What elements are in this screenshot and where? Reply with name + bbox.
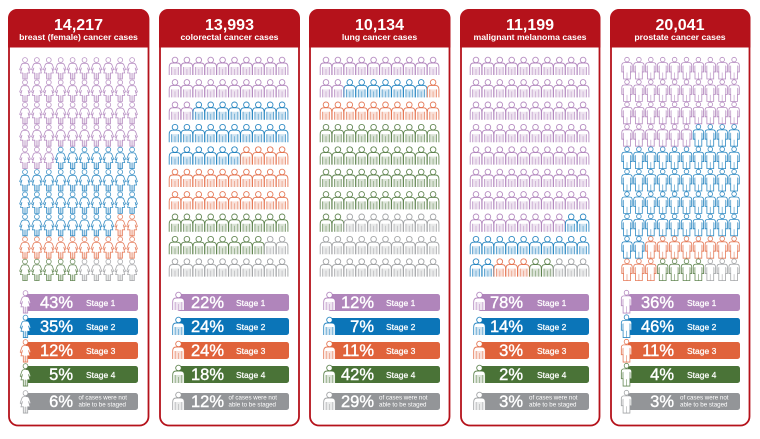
header: colorectal cancer bbox=[159, 9, 300, 48]
legend row: not staged bbox=[621, 390, 740, 413]
figures: stage 1 bbox=[320, 57, 439, 97]
legend row: stage 4: Stage 4 bbox=[236, 370, 266, 380]
figures: stage 1 bbox=[622, 57, 739, 146]
legend row: stage 2 bbox=[474, 317, 589, 336]
legend row: stage 3: Stage 3 bbox=[236, 346, 266, 356]
legend row: stage 2: 7% bbox=[350, 318, 374, 336]
figures: stage 2 bbox=[470, 214, 589, 277]
figures: stage 4 bbox=[320, 124, 439, 232]
legend row: stage 1: 12% bbox=[341, 294, 374, 312]
legend row: stage 4 bbox=[173, 365, 289, 384]
legend row: stage 3 bbox=[324, 341, 440, 360]
legend row: not staged bbox=[20, 391, 138, 413]
legend row: stage 2: Stage 2 bbox=[386, 322, 416, 332]
legend: malignant melanoma bbox=[474, 292, 589, 411]
legend row: not staged: of cases were not bbox=[228, 394, 277, 402]
legend row: stage 3 bbox=[20, 340, 138, 362]
legend row: not staged: able to be staged bbox=[78, 402, 127, 408]
figures: stage 4 bbox=[530, 259, 553, 277]
header: lung cancer: lung cancer cases bbox=[342, 32, 417, 42]
legend row: not staged: able to be staged bbox=[379, 402, 427, 408]
legend row: not staged bbox=[173, 392, 289, 411]
figures: stage 2 bbox=[20, 147, 137, 236]
legend row: stage 3 bbox=[173, 341, 289, 360]
legend: prostate cancer bbox=[621, 290, 740, 413]
legend row: stage 4 bbox=[474, 365, 589, 384]
legend row: not staged: able to be staged bbox=[680, 402, 728, 408]
legend row: stage 4: Stage 4 bbox=[687, 370, 717, 380]
header: malignant melanoma bbox=[460, 9, 600, 48]
figures: stage 1 bbox=[20, 58, 137, 169]
legend row: stage 3: 11% bbox=[642, 342, 674, 360]
header: breast cancer bbox=[8, 9, 149, 48]
header: lung cancer: 10,134 bbox=[355, 17, 404, 34]
panel: malignant melanoma bbox=[460, 9, 600, 426]
legend row: stage 4: Stage 4 bbox=[86, 370, 116, 380]
figures: stage 1 bbox=[169, 57, 288, 120]
legend row: stage 1: Stage 1 bbox=[236, 298, 266, 308]
header: lung cancer bbox=[309, 9, 450, 48]
header: colorectal cancer: 13,993 bbox=[205, 17, 254, 34]
legend row: stage 1: 78% bbox=[490, 294, 523, 312]
figures: stage 1 bbox=[470, 57, 589, 232]
header: prostate cancer bbox=[610, 9, 750, 48]
legend row: stage 2: Stage 2 bbox=[236, 322, 266, 332]
legend row: not staged: able to be staged bbox=[529, 402, 577, 408]
legend row: stage 4: 2% bbox=[499, 366, 523, 384]
legend row: stage 1: Stage 1 bbox=[537, 298, 567, 308]
legend row: stage 1: Stage 1 bbox=[86, 298, 116, 308]
legend: colorectal cancer bbox=[173, 292, 289, 411]
header: malignant melanoma: 11,199 bbox=[506, 17, 554, 34]
legend row: stage 3 bbox=[474, 341, 589, 360]
header: malignant melanoma: malignant melanoma cases bbox=[474, 32, 587, 42]
legend row: stage 1 bbox=[474, 292, 589, 312]
legend row: not staged: 12% bbox=[191, 393, 224, 411]
figures: not staged bbox=[169, 236, 288, 277]
figures: not staged bbox=[705, 259, 739, 281]
figures: stage 2 bbox=[169, 102, 288, 165]
legend row: stage 1: 43% bbox=[40, 294, 73, 312]
legend row: not staged: 6% bbox=[49, 393, 73, 411]
figure grid: colorectal cancer bbox=[169, 57, 288, 277]
figures: stage 4 bbox=[658, 259, 704, 281]
legend row: stage 1: Stage 1 bbox=[386, 298, 416, 308]
figures: stage 3 bbox=[169, 147, 288, 209]
figures: not staged bbox=[320, 214, 439, 277]
legend row: stage 2: Stage 2 bbox=[537, 322, 567, 332]
legend row: not staged: 3% bbox=[650, 393, 674, 411]
figures: stage 4 bbox=[169, 214, 288, 254]
figures: stage 3 bbox=[20, 214, 137, 258]
panel: colorectal cancer bbox=[159, 9, 300, 426]
legend row: stage 3: 3% bbox=[499, 342, 523, 360]
legend row: not staged bbox=[324, 392, 440, 411]
legend row: stage 3: Stage 3 bbox=[86, 346, 116, 356]
figure grid: breast cancer bbox=[20, 58, 137, 281]
figure grid: malignant melanoma bbox=[470, 57, 589, 277]
legend row: stage 3 bbox=[621, 339, 740, 362]
legend row: stage 4: 5% bbox=[49, 366, 73, 384]
legend row: stage 4: Stage 4 bbox=[386, 370, 416, 380]
legend row: not staged: of cases were not bbox=[680, 394, 729, 402]
legend row: stage 3: Stage 3 bbox=[386, 346, 416, 356]
figures: not staged bbox=[79, 259, 137, 281]
panel: prostate cancer bbox=[610, 9, 750, 426]
legend row: stage 4: 42% bbox=[341, 366, 374, 384]
figures: stage 3 bbox=[320, 80, 439, 120]
legend row: stage 2: Stage 2 bbox=[687, 322, 717, 332]
legend row: stage 1 bbox=[621, 290, 740, 313]
legend row: not staged: 3% bbox=[499, 393, 523, 411]
legend: lung cancer bbox=[324, 292, 440, 411]
legend row: stage 4 bbox=[20, 364, 138, 386]
legend row: stage 1 bbox=[20, 291, 138, 313]
header: prostate cancer: 20,041 bbox=[656, 17, 705, 34]
header: breast cancer: 14,217 bbox=[54, 17, 103, 34]
legend row: not staged: of cases were not bbox=[78, 394, 127, 402]
panel: breast cancer bbox=[8, 9, 149, 426]
legend row: stage 2 bbox=[621, 315, 740, 338]
legend row: stage 4: 4% bbox=[650, 366, 674, 384]
figures: stage 4 bbox=[20, 259, 78, 281]
legend row: stage 1 bbox=[173, 292, 289, 312]
legend row: not staged bbox=[474, 392, 589, 411]
legend row: stage 3: 24% bbox=[191, 342, 224, 360]
legend row: stage 4 bbox=[324, 365, 440, 384]
figures: stage 3 bbox=[494, 259, 529, 277]
legend row: not staged: 29% bbox=[341, 393, 374, 411]
header: prostate cancer: prostate cancer cases bbox=[634, 32, 726, 42]
header: colorectal cancer: colorectal cancer cases bbox=[180, 32, 279, 42]
header: breast cancer: breast (female) cancer cases bbox=[19, 32, 138, 42]
legend row: stage 2: 14% bbox=[490, 318, 523, 336]
legend row: not staged: able to be staged bbox=[228, 402, 277, 408]
figure grid: prostate cancer bbox=[622, 57, 739, 281]
legend row: stage 3: 12% bbox=[40, 342, 73, 360]
legend row: stage 2: 35% bbox=[40, 318, 73, 336]
legend row: stage 2: 24% bbox=[191, 318, 224, 336]
figures: not staged bbox=[554, 259, 589, 277]
legend row: stage 3: Stage 3 bbox=[537, 346, 567, 356]
figures: stage 3 bbox=[622, 236, 739, 281]
legend: breast cancer bbox=[20, 291, 138, 413]
legend row: stage 2 bbox=[173, 317, 289, 336]
legend row: stage 1: 22% bbox=[191, 294, 224, 312]
legend row: stage 4: Stage 4 bbox=[537, 370, 567, 380]
legend row: stage 2 bbox=[20, 315, 138, 338]
figures: stage 2 bbox=[622, 124, 739, 258]
legend row: stage 3: 11% bbox=[342, 342, 374, 360]
legend row: not staged: of cases were not bbox=[379, 394, 428, 402]
legend row: stage 2 bbox=[324, 317, 440, 336]
legend row: stage 2: 46% bbox=[641, 318, 674, 336]
legend row: not staged: of cases were not bbox=[529, 394, 578, 402]
figure grid: lung cancer bbox=[320, 57, 439, 277]
figures: stage 2 bbox=[344, 80, 427, 97]
legend row: stage 4: 18% bbox=[191, 366, 224, 384]
legend row: stage 1: 36% bbox=[641, 294, 674, 312]
legend row: stage 1: Stage 1 bbox=[687, 298, 717, 308]
panel: lung cancer bbox=[309, 9, 450, 426]
legend row: stage 3: Stage 3 bbox=[687, 346, 717, 356]
legend row: stage 4 bbox=[621, 363, 740, 386]
legend row: stage 2: Stage 2 bbox=[86, 322, 116, 332]
legend row: stage 1 bbox=[324, 292, 440, 312]
